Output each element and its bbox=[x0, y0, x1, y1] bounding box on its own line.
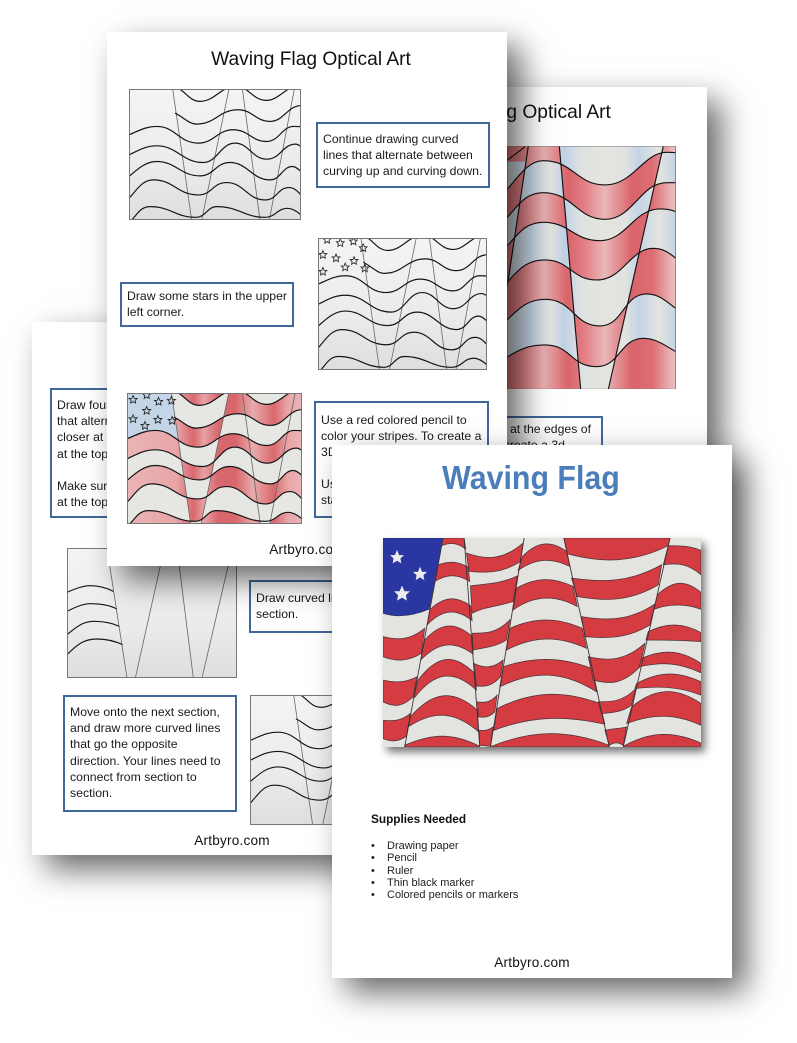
list: supplies: Ruler bbox=[387, 865, 413, 877]
list: supplies: • bbox=[371, 840, 375, 852]
callout: draw four lines: Draw four lines bbox=[57, 398, 139, 412]
callout: use a red colored pencil: stars. bbox=[321, 493, 351, 507]
page: waving flag cover (front) bbox=[332, 445, 732, 978]
callout: draw some stars: left corner. bbox=[127, 305, 184, 319]
flag red stripes bbox=[383, 538, 701, 747]
heading: Waving Flag Optical Art: Waving Flag Optical Art bbox=[411, 102, 611, 123]
image: continued curved lines bbox=[129, 89, 301, 220]
callout: use a red colored pencil: 3D effect, color the edges dark. bbox=[321, 445, 489, 459]
image: second section curves bbox=[250, 695, 332, 825]
callout: move onto the next section: direction. Your lines need to bbox=[70, 754, 221, 768]
callout: draw four lines: Make sure they meet bbox=[57, 479, 171, 493]
callout: blue at the edges bbox=[440, 416, 603, 516]
callout: continue drawing curved lines: lines that alternate between bbox=[323, 148, 473, 162]
list: supplies: • bbox=[371, 865, 375, 877]
flag section lines bbox=[405, 538, 670, 747]
footer: Artbyro.com: Artbyro.com bbox=[494, 955, 570, 970]
image: first section curves bbox=[67, 548, 237, 678]
list: supplies: • bbox=[371, 852, 375, 864]
callout: move onto the next section: that go the opposite bbox=[70, 737, 178, 751]
callout: use a red colored pencil: color your stripes. To create a bbox=[321, 429, 481, 443]
callout: draw four lines: that alternate, drawn bbox=[57, 414, 169, 428]
callout: continue drawing curved lines bbox=[316, 122, 490, 188]
page: waving flag optical art steps (top) bbox=[107, 32, 507, 566]
callout: use a red colored pencil: Use blue colored pencil for the bbox=[321, 477, 486, 491]
callout: blue at the edges: Use blue at the edges of bbox=[458, 422, 591, 436]
callout: use a red colored pencil bbox=[314, 401, 489, 518]
list: supplies bbox=[371, 840, 518, 901]
callout: move onto the next section: section. bbox=[70, 786, 112, 800]
callout: move onto the next section: connect from section to bbox=[70, 770, 197, 784]
callout: move onto the next section bbox=[63, 695, 237, 812]
callout: draw four lines: closer at the bottom, bbox=[57, 430, 168, 444]
page: drawing the curved lines (left) bbox=[32, 322, 432, 855]
callout: move onto the next section: and draw more curved lines bbox=[70, 721, 220, 735]
footer: Artbyro.com: Artbyro.com bbox=[194, 833, 270, 848]
callout: draw curved lines in section: Draw curved lines in the first bbox=[256, 591, 410, 605]
callout: draw some stars: Draw some stars in the upper bbox=[127, 289, 287, 303]
callout: draw four lines bbox=[50, 388, 220, 518]
heading: Waving Flag: Waving Flag bbox=[442, 459, 620, 496]
image: finished waving flag artwork bbox=[383, 538, 701, 747]
callout: draw four lines: at the top. bbox=[57, 495, 112, 509]
callout: draw four lines: at the top. bbox=[57, 447, 112, 461]
callout: draw curved lines in section: section. bbox=[256, 607, 298, 621]
list: supplies: • bbox=[371, 889, 375, 901]
list: supplies: Drawing paper bbox=[387, 840, 459, 852]
page: optical art final step (back right) bbox=[507, 76, 746, 636]
callout: continue drawing curved lines: curving up and curving down. bbox=[323, 164, 482, 178]
callout: continue drawing curved lines: Continue drawing curved bbox=[323, 132, 459, 146]
list: supplies: Colored pencils or markers bbox=[387, 889, 518, 901]
image: red colored pencil stripes bbox=[127, 393, 302, 524]
list: supplies: Thin black marker bbox=[387, 877, 474, 889]
heading: Supplies Needed: Supplies Needed bbox=[371, 812, 466, 826]
list: supplies: • bbox=[371, 877, 375, 889]
heading: Waving Flag Optical Art: Waving Flag Optical Art bbox=[211, 49, 411, 70]
image: line drawing with outlined stars bbox=[318, 238, 487, 370]
image: colored pencil flag with blue shading bbox=[507, 146, 676, 389]
callout: move onto the next section: Move onto the next section, bbox=[70, 705, 220, 719]
flag blue canton with stars bbox=[383, 538, 443, 616]
callout: draw curved lines in section bbox=[249, 580, 424, 633]
footer: Artbyro.com: Artbyro.com bbox=[269, 542, 345, 557]
callout: draw some stars bbox=[120, 282, 294, 327]
list: supplies: Pencil bbox=[387, 852, 417, 864]
callout: use a red colored pencil: Use a red colored pencil to bbox=[321, 413, 467, 427]
